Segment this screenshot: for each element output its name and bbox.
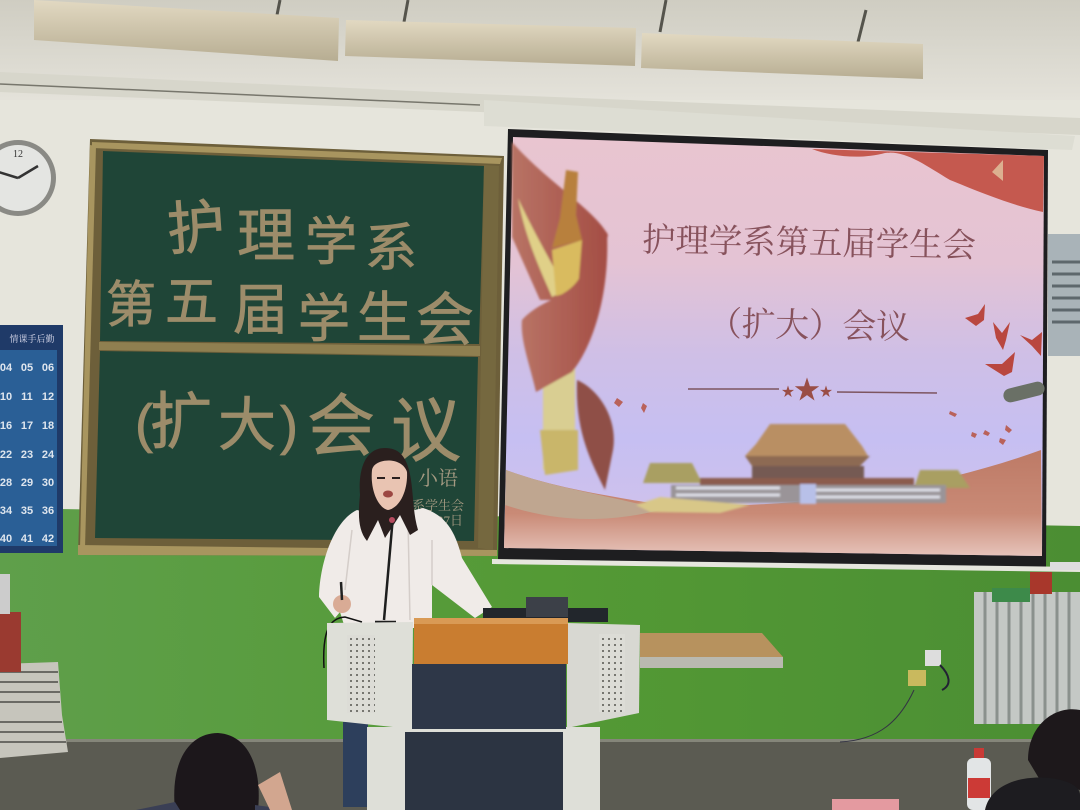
wall clock — [0, 140, 56, 216]
timetable board: 34 — [0, 505, 13, 517]
slide flag top band — [512, 142, 608, 300]
blackboard heading line 2: 学 — [298, 291, 350, 349]
timetable board: 36 — [42, 505, 54, 517]
slide ground — [504, 450, 1042, 556]
blackboard heading line 3: ( — [135, 394, 153, 454]
blackboard heading line 2: 第 — [106, 277, 156, 333]
blackboard heading line 3 — [135, 388, 461, 470]
wall notice — [1048, 234, 1080, 356]
blackboard signature — [412, 467, 464, 528]
blackboard heading line 3: 大 — [218, 393, 276, 458]
timetable board: 23 — [21, 449, 33, 461]
blackboard signature: 27日 — [437, 513, 463, 528]
blackboard heading line 2: 届 — [233, 279, 288, 341]
timetable board: 17 — [21, 420, 33, 432]
timetable board: 41 — [21, 533, 33, 545]
blackboard heading line 3: ) — [280, 396, 298, 456]
slide palace — [636, 424, 970, 513]
face — [372, 460, 407, 510]
timetable board: 18 — [42, 420, 54, 432]
blackboard heading line 1: 理 — [237, 204, 295, 269]
blackboard signature: 系学生会 — [412, 498, 464, 513]
blackboard heading line 2: 五 — [165, 273, 218, 332]
timetable board: 11 — [21, 391, 33, 403]
timetable board: 24 — [42, 449, 55, 461]
audience heads and bottle — [136, 709, 1080, 810]
timetable board: 12 — [42, 391, 54, 403]
timetable board: 28 — [0, 477, 12, 489]
timetable board: 情课手后勤 — [9, 333, 55, 344]
wall fixtures — [640, 633, 949, 742]
projector screen: ★ — [781, 384, 795, 399]
blackboard heading line 2 — [106, 273, 474, 353]
timetable board — [0, 325, 63, 553]
hair — [359, 448, 418, 541]
timetable board: 16 — [0, 420, 12, 432]
blackboard heading line 3: 会 — [307, 389, 375, 465]
timetable board: 22 — [0, 449, 12, 461]
blackboard heading line 1 — [165, 194, 417, 278]
blackboard heading line 3: 议 — [391, 392, 461, 470]
blackboard heading line 1: 学 — [305, 214, 357, 272]
speaker — [319, 448, 492, 807]
jeans — [343, 722, 368, 807]
slide column — [543, 340, 575, 470]
ceiling lights — [34, 0, 923, 79]
blackboard heading line 1: 护 — [165, 194, 227, 263]
timetable board: 05 — [21, 362, 33, 374]
timetable board: 10 — [0, 391, 12, 403]
shirt — [319, 508, 492, 628]
timetable board: 42 — [42, 533, 54, 545]
blackboard heading line 2: 会 — [416, 288, 474, 353]
slide red banner — [812, 149, 1044, 212]
timetable board: 30 — [42, 477, 54, 489]
timetable board: 04 — [0, 362, 13, 374]
microphone — [375, 516, 396, 622]
wall clock: 12 — [13, 149, 23, 160]
blackboard heading line 1: 系 — [365, 220, 417, 278]
blackboard heading line 2: 生 — [357, 287, 412, 349]
slide petals — [614, 398, 1012, 445]
timetable board: 40 — [0, 533, 12, 545]
timetable board: 06 — [42, 362, 54, 374]
slide birds — [965, 304, 1042, 376]
slide gold wings and finial — [518, 198, 566, 297]
timetable board: 29 — [21, 477, 33, 489]
blackboard — [78, 139, 504, 556]
projector screen: ★ — [819, 384, 833, 399]
blackboard heading line 3: 扩 — [150, 388, 212, 457]
slide flag wrap — [522, 232, 607, 392]
projector screen: ★ — [794, 376, 820, 405]
hand and pen — [333, 595, 351, 613]
projector screen — [484, 100, 1080, 572]
blackboard signature: 小语 — [418, 467, 458, 490]
slide subtitle: （扩大）会议 — [708, 305, 910, 347]
slide title: 护理学系第五届学生会 — [642, 222, 976, 265]
slide star divider — [688, 389, 937, 393]
timetable board: 35 — [21, 505, 33, 517]
stacks of books — [0, 574, 68, 758]
podium — [327, 597, 640, 810]
radiator — [974, 562, 1080, 724]
